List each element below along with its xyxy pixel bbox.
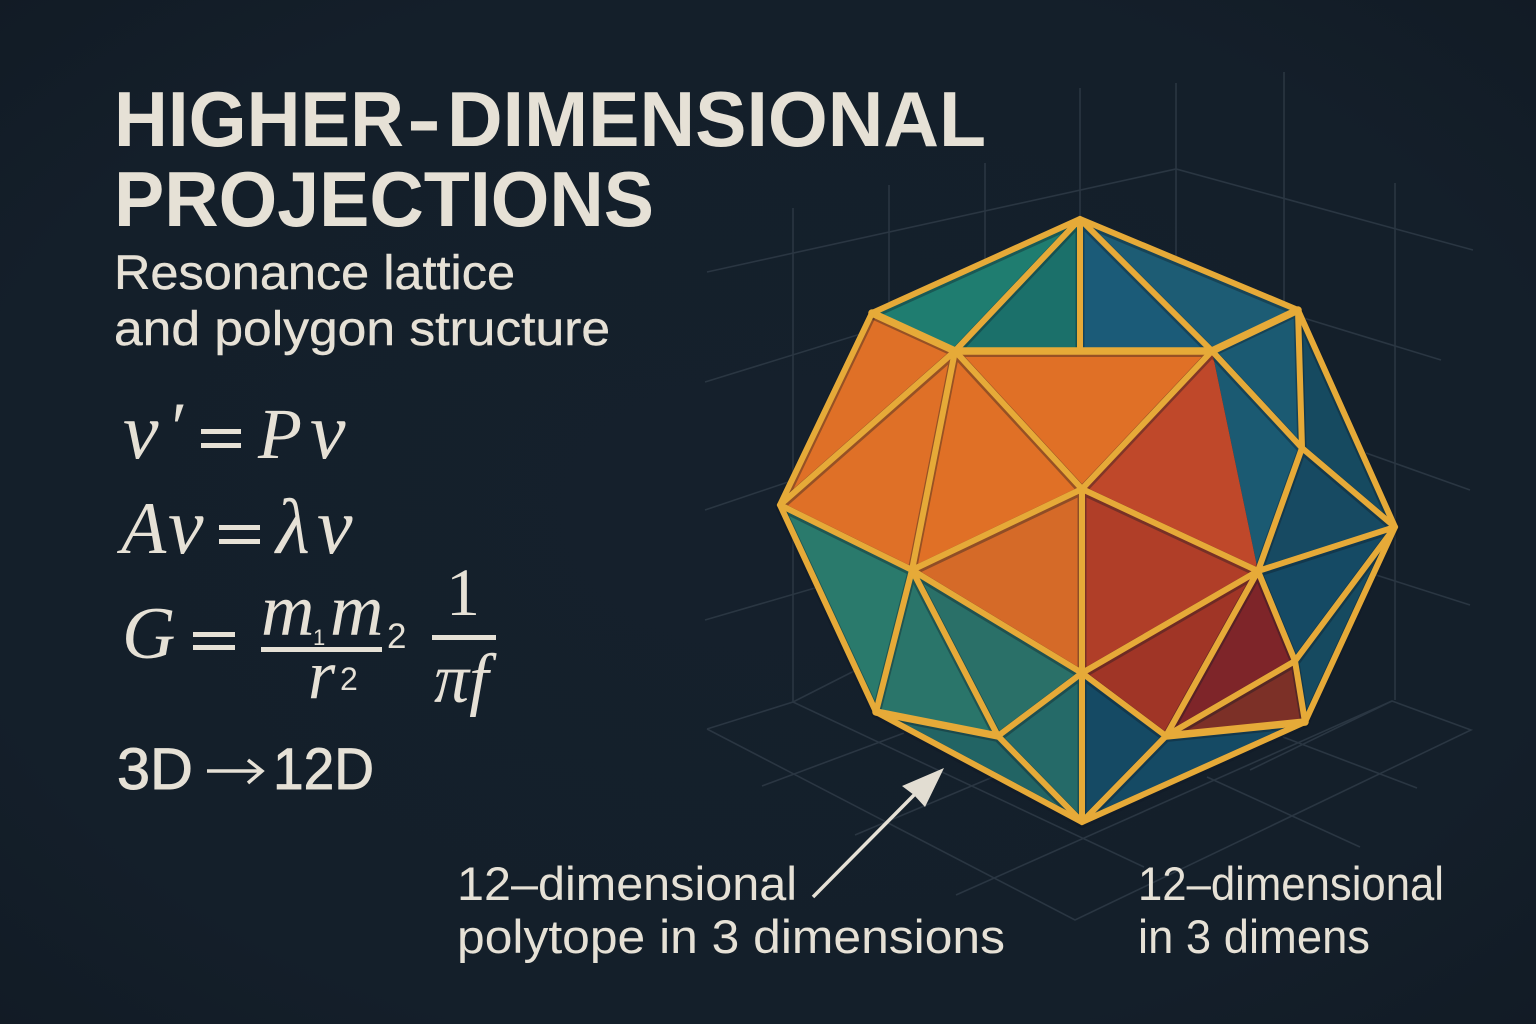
title: PROJECTIONS: [114, 155, 654, 243]
title: [114, 75, 986, 243]
golden inner edges: [780, 219, 1395, 822]
blue lower faces: [1082, 673, 1305, 822]
formula: G equals fractions: 1: [446, 554, 480, 630]
dimension label: 3D to 12D: 3D: [117, 737, 193, 802]
polytope: 12-dimensional polygon structure: [780, 219, 1395, 824]
subtitle: [114, 247, 610, 356]
dimension label: 3D to 12D: 12D: [273, 737, 374, 802]
arrow pointing to polytope: [813, 768, 944, 897]
formula: G equals fractions: [122, 554, 497, 718]
formula: G equals fractions: 2: [340, 661, 358, 697]
title: HIGHER: [114, 75, 404, 163]
orange faces: [780, 313, 1212, 673]
formula: G equals fractions: m: [330, 570, 383, 652]
subtitle: and polygon structure: [114, 303, 610, 356]
formula: G equals fractions: G: [122, 593, 175, 675]
formula: G equals fractions: πf: [434, 641, 497, 718]
formula: A v equals lambda v: v: [317, 483, 353, 571]
formula: G equals fractions: m: [261, 570, 314, 652]
callout: left polytope label: 12–dimensional: [457, 857, 797, 910]
formula: A v equals lambda v: λ: [274, 483, 310, 570]
golden thick edges: [872, 310, 1305, 736]
formula: G equals fractions: r: [308, 637, 336, 714]
teal upper faces: [872, 219, 1080, 351]
perspective grid behind polytope: [705, 72, 1473, 920]
formula: A v equals lambda v: A: [116, 488, 167, 570]
edge shadow: [780, 220, 1395, 824]
formula: v prime equals P v: [123, 388, 346, 476]
callout: left polytope label: [457, 857, 1005, 963]
title: -: [407, 75, 441, 163]
blue upper and right faces: [1080, 219, 1395, 722]
callout: right truncated label: 12–dimensional: [1138, 857, 1444, 910]
callout: left polytope label: polytope in 3 dimensions: [457, 910, 1005, 963]
formula: A v equals lambda v: [116, 483, 353, 571]
formula: v prime equals P v: ′: [167, 388, 184, 468]
red faces: [1082, 351, 1305, 736]
title: DIMENSIONAL: [447, 75, 986, 163]
golden outer edges: [780, 219, 1395, 822]
subtitle: Resonance lattice: [114, 247, 515, 300]
dimension label: 3D to 12D: [117, 737, 374, 802]
formula: A v equals lambda v: v: [168, 483, 204, 571]
callout: right truncated label: in 3 dimens: [1138, 910, 1370, 963]
teal lower faces: [780, 505, 1082, 822]
formula: v prime equals P v: v: [310, 388, 346, 476]
formula: G equals fractions: 1: [313, 625, 325, 650]
callout: right truncated label: [1138, 857, 1444, 963]
formula: G equals fractions: 2: [387, 617, 406, 656]
formula: v prime equals P v: v: [123, 388, 159, 476]
formula: v prime equals P v: P: [257, 394, 302, 474]
